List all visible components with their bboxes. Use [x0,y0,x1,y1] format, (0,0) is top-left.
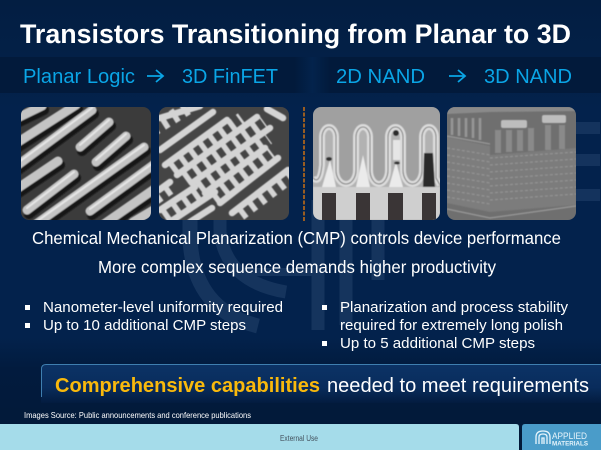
subtitle: logic and NAND transitions: 2D NAND [336,66,425,88]
image: 3D FinFET micrograph [159,107,289,220]
watermark logo [190,128,600,330]
image: 2D NAND micrograph [313,107,440,223]
bullets: NAND requirements: required for extremely long polish [340,317,563,334]
bullets: logic requirements [25,299,283,334]
subtitle: logic and NAND transitions: 3D FinFET [182,66,278,88]
bullets: logic requirements: Nanometer-level uniformity required [43,299,283,316]
bullets: NAND requirements: Planarization and process stability [340,299,568,316]
footer logo panel: MATERIALS [552,442,588,448]
footer logo panel: APPLIED [552,431,587,442]
text: productivity statement: More complex sequence demands higher productivity [98,257,496,277]
icon: Applied Materials mark [536,431,550,444]
image: 3D NAND micrograph [447,107,576,220]
arrow: planar to FinFET [147,70,163,82]
image: planar logic micrograph [21,107,151,220]
footer bar: External Use [280,434,318,443]
bullets: NAND requirements [322,299,568,352]
subtitle band [0,57,601,93]
bullets: NAND requirements: Up to 5 additional CMP steps [340,335,535,352]
subtitle: logic and NAND transitions [23,66,572,88]
callout: needed to meet requirements [327,374,589,397]
title: Transistors Transitioning from Planar to 3D [20,19,571,49]
bullets: logic requirements: Up to 10 additional CMP steps [43,317,246,334]
callout: Comprehensive capabilities [55,374,320,397]
text: CMP statement: Chemical Mechanical Planarization (CMP) controls device performance [32,228,561,248]
footer logo panel [522,424,601,450]
footer bar [0,424,519,450]
subtitle: logic and NAND transitions: 3D NAND [484,66,572,88]
arrow: 2D to 3D NAND [449,70,465,82]
subtitle: logic and NAND transitions: Planar Logic [23,66,135,88]
divider: dashed orange [303,107,305,221]
callout [41,364,601,403]
source note: Images Source: Public announcements and conference publications [24,410,251,420]
